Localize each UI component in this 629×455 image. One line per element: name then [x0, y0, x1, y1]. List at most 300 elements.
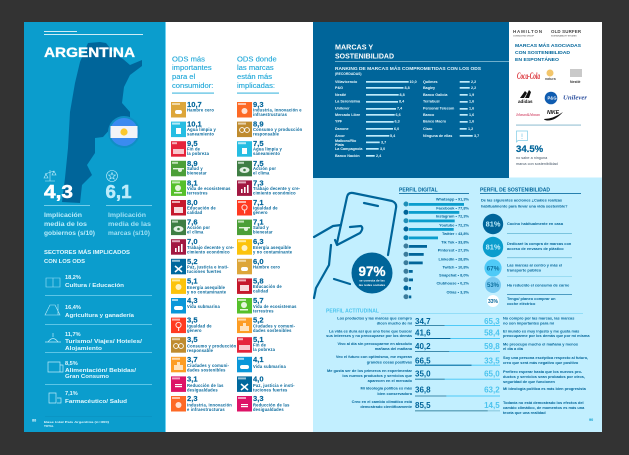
brands score: 6,1	[106, 182, 132, 202]
list: brand SDGs: 4,0	[253, 374, 264, 383]
list: consumer SDGs: y no contaminante	[187, 290, 227, 294]
right statements: seguridad de que funcionen	[503, 379, 556, 384]
sector: tourism: Turismo/ Viajes/ Hoteles/	[65, 339, 143, 345]
list: brand SDGs: Vida submarina	[253, 364, 286, 369]
bar chart: social networks: Facebook • 77,8%	[436, 206, 470, 211]
list: brand SDGs: Energía asequible	[253, 245, 292, 250]
list: consumer SDGs: 3,5	[187, 335, 198, 344]
left statements: Creo en el cambio climático está	[352, 399, 413, 404]
callout: 97 percent	[352, 252, 392, 294]
panel: spontaneous brand association	[509, 22, 602, 178]
bars: right column: 1,2	[468, 127, 473, 131]
bars: right column: Bagley	[423, 86, 436, 90]
bars: left column: La Serenísima	[335, 100, 361, 104]
list: consumer SDGs: 4,3	[187, 296, 198, 305]
list: consumer SDGs: Igualdad de	[187, 324, 212, 328]
bars: right column: 1,6	[469, 100, 474, 104]
heading: consumer: consumidor:	[172, 81, 213, 90]
bar chart: social networks: Instagram • 72,3%	[436, 214, 470, 219]
left statements: bien conservadora	[377, 391, 413, 396]
item: meat	[485, 277, 572, 295]
bars: left column: 3,0	[380, 147, 385, 151]
item: transport: transporte público	[507, 268, 542, 272]
left values: 34,7	[415, 317, 431, 326]
heading: consumer: importantes	[172, 63, 212, 72]
sectors heading: SECTORES MÁS IMPLICADOS	[44, 249, 131, 256]
government score: 4,3	[44, 182, 73, 202]
list: brand SDGs: la pobreza	[253, 347, 276, 352]
brand logos	[515, 69, 588, 121]
bars: right column: 1,6	[469, 106, 474, 110]
list: consumer SDGs: Consumo y producción	[187, 344, 237, 348]
list: brand SDGs: 5,7	[253, 296, 264, 305]
list: brand SDGs: Ciudades y comuni-	[253, 324, 296, 328]
left values	[415, 317, 431, 410]
list: brand SDGs: Consumo y producción	[253, 127, 303, 132]
right values: 33,5	[484, 356, 500, 366]
footer: page number and base: TOTAL	[44, 424, 54, 428]
sector: agriculture: Agricultura y ganadería	[65, 313, 134, 319]
question: habitualmente para llevar una vida sostenible?	[481, 204, 568, 209]
left statements	[326, 316, 413, 409]
list: consumer SDGs: Energía asequible	[187, 285, 226, 290]
subheading	[335, 65, 482, 76]
bar chart: social networks: Twitter • 43,8%	[442, 231, 470, 236]
brand logos: Nestlé	[570, 80, 581, 84]
right values	[484, 317, 500, 410]
list: brand SDGs: Paz, justicia e insti-	[253, 383, 295, 388]
heading: consumer: ODS más	[172, 54, 205, 64]
sector: culture: Cultura / Educación	[65, 283, 124, 289]
list: brand SDGs: 7,5	[253, 159, 264, 168]
list: consumer SDGs: Educación de	[187, 206, 216, 210]
brand logos: NIKE	[547, 110, 560, 116]
list: brand SDGs: 3,3	[253, 394, 264, 403]
right statements	[503, 316, 590, 415]
list: consumer SDGs: tuciones fuertes	[187, 269, 222, 274]
icon: Argentine flag	[108, 116, 140, 148]
bars: left column: Plata	[335, 143, 345, 147]
list: brand SDGs: el clima	[253, 170, 270, 176]
panel: digital profile	[314, 188, 470, 300]
list: brand SDGs: tuciones fuertes	[253, 388, 288, 392]
footer: page number and base	[32, 418, 109, 428]
list: brand SDGs: cimiento económico	[253, 190, 296, 196]
bars: left column: 8,4	[399, 100, 405, 104]
list: consumer SDGs: e infraestructuras	[187, 407, 225, 412]
list: consumer SDGs: dades sostenibles	[187, 368, 226, 372]
footer: page number and base: 88	[32, 418, 36, 422]
left values: 85,5	[415, 401, 431, 410]
left values: 36,8	[415, 386, 431, 395]
sectors heading	[44, 249, 131, 265]
list: brand SDGs: y no contaminante	[253, 250, 293, 254]
subheading: (RECORDADAS)	[335, 72, 362, 76]
bar chart: social networks: Whatsapp • 91,3%	[436, 197, 470, 202]
bar chart: social networks: Otras • 3,3%	[446, 290, 470, 295]
left values: 40,2	[415, 342, 431, 351]
partner logos: HAMILTON	[513, 29, 542, 34]
bars: left column: La Campagnola	[335, 147, 363, 151]
item: cooking: 81%	[486, 220, 501, 229]
bars: left column: Banco Nación	[335, 154, 360, 158]
heading: brands: implicadas:	[237, 81, 275, 90]
left statements: los nuevos productos y servicios que	[342, 373, 413, 378]
bars: right column: 1,9	[469, 93, 474, 97]
right statements: cambio climático, de momentos es más una	[503, 405, 585, 410]
list: consumer SDGs: Salud y	[187, 166, 203, 171]
list: consumer SDGs: 9,5	[187, 139, 198, 148]
right values: 59,8	[484, 342, 500, 351]
sector: food: Gran Consumo	[65, 374, 109, 380]
map of Argentina	[62, 42, 142, 203]
right values: 65,3	[484, 317, 500, 326]
bars: left column: 8,8	[400, 93, 405, 97]
brands score: Implicación	[108, 212, 146, 219]
heading: consumer	[172, 54, 214, 94]
panel: SDG rankings	[166, 22, 313, 432]
bars: left column: 5,4	[390, 134, 396, 138]
left statements: mañana del mañana	[375, 346, 413, 351]
bar chart: social networks: Youtube • 72,2%	[439, 223, 470, 228]
list: brand SDGs: Trabajo decente y cre-	[253, 186, 301, 191]
left values: 35,0	[415, 370, 431, 379]
bar chart: social networks	[403, 197, 470, 300]
list: consumer SDGs: 10,7	[187, 100, 202, 109]
panel: Argentina overview	[24, 22, 166, 432]
bars: right column: Banco	[423, 113, 435, 117]
panel: sustainability profile	[480, 188, 581, 307]
list: consumer SDGs: género	[187, 328, 202, 333]
list: brand SDGs: Educación de	[253, 284, 282, 289]
heading	[515, 42, 582, 63]
sector: pharma: Farmacéutico/ Salud	[65, 399, 127, 405]
heading	[335, 42, 394, 60]
list: consumer SDGs: Fin de	[187, 146, 201, 152]
item: cooking	[483, 214, 572, 234]
partner logos	[513, 29, 582, 38]
list: consumer SDGs: 8,9	[187, 159, 198, 168]
government score: gobiernos (s/10)	[44, 230, 95, 237]
right statements: no son importantes para mí	[503, 320, 555, 326]
left statements: Veo el futuro con optimismo, me esperan	[336, 354, 413, 359]
icon: scales	[44, 170, 56, 181]
list: brand SDGs: 9,3	[253, 100, 264, 109]
bar chart: social networks: Snapchat • 8,0%	[439, 273, 470, 278]
list: brand SDGs: bienestar	[253, 230, 273, 234]
list: consumer SDGs: 8,1	[187, 178, 198, 187]
partner logos: SUSTAINABILITY STUDIES	[551, 34, 577, 38]
list: brand SDGs	[237, 100, 303, 412]
heading: brands: están más	[237, 72, 272, 81]
bars: left column: P&G	[335, 86, 343, 90]
icon: star badge	[106, 170, 118, 182]
question	[481, 198, 568, 209]
item: electric car	[487, 295, 556, 307]
list: consumer SDGs: Industria, innovación	[187, 402, 232, 408]
stat: no brand: no sabe a ninguna	[516, 156, 548, 160]
sector: tourism: 11,7%	[65, 332, 81, 338]
list: brand SDGs: dades sostenibles	[253, 328, 292, 333]
left statements: dicen mucho de mí	[377, 321, 413, 326]
item: meat: 53%	[487, 283, 500, 289]
left statements: sus intereses y no preocuparse por los demás	[326, 333, 412, 338]
left values: 41,6	[415, 328, 431, 338]
page number: 90	[589, 418, 593, 422]
right values: 63,2	[484, 386, 500, 395]
left statements: grandes cosas positivas	[367, 360, 412, 364]
brand logos: Unilever	[563, 96, 588, 102]
government score	[44, 182, 95, 237]
heading: MARCAS Y	[335, 42, 373, 52]
bars: left column: Villavicencio	[335, 80, 358, 84]
partner logos: OLD SURFER	[551, 29, 582, 34]
item: transport	[484, 259, 572, 277]
left values: 66,5	[415, 356, 431, 366]
list: brand SDGs: Salud y	[253, 225, 269, 230]
heading: PERFIL DE SOSTENIBILIDAD	[480, 188, 550, 194]
government score: Implicación	[44, 212, 82, 219]
list: brand SDGs: 5,1	[253, 335, 264, 344]
list: brand SDGs: 5,8	[253, 276, 264, 285]
list: brand SDGs: 7,5	[253, 139, 264, 148]
list: consumer SDGs: 10,1	[187, 120, 203, 129]
list: brand SDGs: Hambre cero	[253, 264, 280, 270]
bars: right column: 3,7	[474, 134, 479, 138]
sector: food: Alimentación/ Bebidas/	[65, 368, 137, 374]
partner logos: CONSULTING GROUP	[513, 36, 535, 38]
list: brand SDGs: terrestres	[253, 308, 274, 314]
right statements: creo que será más negativo que positivo	[503, 360, 579, 365]
list: brand SDGs: infraestructuras	[253, 112, 288, 117]
right statements: Prefiero esperar hasta que los nuevos pro-	[503, 369, 583, 374]
bars: left column: 2,4	[376, 154, 382, 158]
list: brand SDGs: 4,1	[253, 355, 264, 364]
bars: left column: Danone	[335, 127, 349, 131]
right statements: Soy una persona escéptica respecto al futuro,	[503, 355, 588, 360]
stat: no brand	[516, 144, 558, 166]
list: brand SDGs: 5,2	[253, 316, 264, 325]
list: consumer SDGs: 5,1	[187, 276, 198, 285]
bars: right column: Claro	[423, 127, 433, 131]
brands score: marcas (s/10)	[108, 230, 150, 237]
list: consumer SDGs: Ciudades y comuni-	[187, 363, 230, 368]
bars: right column: Personal Telecom	[423, 106, 455, 110]
sector: culture: 18,2%	[65, 275, 81, 281]
item: cooking: Cocino habitualmente en casa	[507, 221, 564, 226]
item: transport: Las marcas al centro y más el	[507, 262, 562, 268]
heading: PERFIL DIGITAL	[399, 188, 438, 194]
panel: attitudinal profile	[326, 308, 593, 422]
callout: 97 percent: se conecta de las	[359, 278, 385, 282]
callout: 97 percent: 97%	[358, 264, 386, 279]
right statements: Me preocupo mucho el mañana y menos	[503, 342, 578, 346]
right statements: El mundo es muy injusto y me gusta más	[503, 328, 579, 334]
bars: left column: 6,6	[396, 113, 401, 117]
bars: left column: 6,3	[394, 120, 400, 124]
sector: food	[45, 361, 152, 385]
list: brand SDGs: Industria, innovación e	[253, 108, 302, 112]
left statements: aparecen en el mercado	[368, 378, 413, 383]
list: consumer SDGs: 5,2	[187, 257, 198, 266]
title: ARGENTINA	[44, 45, 135, 60]
bars: left column: 7,4	[397, 106, 403, 110]
item: plastic packaging: acceso de envases de plástico	[507, 246, 564, 251]
stat: no brand: marca con sostenibilidad	[516, 162, 558, 166]
item: plastic packaging: Dedicaré la compra de marcas con	[507, 241, 572, 246]
list: brand SDGs: Igualdad de	[253, 206, 278, 210]
right statements: No compro por las marcas, las marcas	[503, 316, 574, 320]
list: consumer SDGs: Reducción de las	[187, 383, 224, 388]
bars: right column: Quilmes	[423, 80, 438, 84]
list: consumer SDGs	[171, 100, 237, 412]
brands score: media de las	[108, 221, 152, 228]
government score: media de los	[44, 221, 88, 228]
brand logos: natura	[545, 77, 556, 81]
list: consumer SDGs: 8,0	[187, 198, 198, 207]
list: consumer SDGs: Paz, justicia e insti-	[187, 264, 229, 270]
heading: EN ESPONTÁNEO	[515, 56, 559, 63]
list: consumer SDGs: desigualdades	[187, 388, 218, 392]
item: plastic packaging: 81%	[486, 243, 501, 252]
bars: left column: Unilever	[335, 106, 350, 110]
list: brand SDGs: Acción por	[253, 166, 276, 171]
list: brand SDGs: desigualdades	[253, 407, 284, 412]
sector: agriculture	[45, 304, 152, 325]
list: consumer SDGs: Trabajo decente y cre-	[187, 245, 235, 250]
item: plastic packaging	[483, 237, 572, 258]
list: brand SDGs: 7,1	[253, 198, 264, 207]
heading: SOSTENIBILIDAD	[335, 52, 394, 60]
list: consumer SDGs: 2,3	[187, 394, 198, 403]
panel: brand ranking	[313, 22, 509, 178]
bars: right column: Banco Galicia	[423, 93, 448, 97]
list: brand SDGs: Reducción de las	[253, 402, 290, 408]
bars: right column: Ninguna de ellas	[423, 134, 452, 138]
bars: left column: Nestlé	[335, 93, 346, 97]
left statements: Me gusta ser de los primeros en experimentar	[327, 368, 412, 373]
icon: alert speech box	[516, 131, 528, 142]
sector: pharma: 7,1%	[65, 391, 78, 397]
right statements: el día a día	[503, 346, 524, 351]
bar chart: social networks: LinkedIn • 28,8%	[438, 256, 470, 261]
question: De las siguientes acciones ¿Cuáles realizas	[481, 198, 562, 203]
sector: agriculture: 16,4%	[65, 305, 81, 311]
list: consumer SDGs: 3,7	[187, 355, 198, 364]
subheading: RANKING DE MARCAS MÁS COMPROMETIDAS CON LOS ODS	[335, 65, 482, 72]
bars: left column: 10,0	[410, 80, 417, 84]
list: brand SDGs: Fin de	[253, 342, 267, 348]
brand logos: adidas	[518, 99, 533, 104]
list: brand SDGs: 7,1	[253, 218, 264, 227]
list: consumer SDGs: 3,1	[187, 374, 198, 383]
list: brand SDGs: saneamiento	[253, 151, 280, 156]
bars: left column: 3,7	[381, 140, 386, 144]
item: electric car: Tengo/ planeo comprar un	[507, 296, 556, 301]
right values: 14,5	[484, 401, 500, 410]
bars: right column	[423, 80, 479, 138]
sector: food: 8,5%	[65, 361, 78, 367]
bar chart: social networks: Pinterest • 27,3%	[438, 248, 470, 253]
left statements: demostrado científicamente	[360, 404, 413, 409]
brands score	[106, 182, 152, 237]
bars: left column: YPF	[335, 120, 343, 124]
list: consumer SDGs: cimiento económico	[187, 250, 230, 254]
bars: right column: 1,6	[469, 113, 474, 117]
scale bars	[415, 325, 500, 411]
list: brand SDGs: Vida de ecosistemas	[253, 304, 297, 309]
list: brand SDGs: Agua limpia y	[253, 146, 282, 152]
bars: right column: 1,6	[469, 120, 474, 124]
list: brand SDGs: 6,0	[253, 257, 264, 266]
right statements: Todavía no está demostrado los efectos del	[503, 400, 584, 405]
heading: brands: las marcas	[237, 63, 274, 72]
list: consumer SDGs: 7,6	[187, 218, 198, 227]
bars: left column: Mercado Libre	[335, 113, 360, 117]
list: consumer SDGs: el clima	[187, 230, 204, 234]
list: consumer SDGs: Vida de ecosistemas	[187, 186, 231, 191]
right statements: Mi ideología política es más bien progresista	[503, 386, 587, 391]
item: electric car: coche eléctrico	[507, 301, 536, 306]
list: consumer SDGs: 3,5	[187, 316, 198, 325]
callout: 97 percent: las redes sociales	[359, 283, 386, 287]
sector: tourism: Alojamiento	[65, 346, 102, 352]
right statements: teoría que una realidad	[503, 410, 546, 415]
list: consumer SDGs: saneamiento	[187, 132, 214, 136]
list: consumer SDGs: terrestres	[187, 190, 208, 196]
right statements: preocuparme por los demás que por mí misma	[503, 333, 590, 338]
left statements: Los productos y las marcas que compro	[337, 316, 413, 321]
heading: consumer: para el	[172, 72, 196, 81]
item: transport: 67%	[487, 265, 500, 272]
panel: right page background	[313, 22, 602, 432]
sector: tourism	[45, 332, 152, 353]
list: consumer SDGs: Acción por	[187, 225, 210, 230]
sector: pharma	[45, 391, 152, 416]
bar chart: social networks: Clubhouse • 0,2%	[436, 281, 470, 286]
left statements: La vida es dura así que uno tiene que buscar	[329, 328, 412, 334]
bars: left column: 6,0	[394, 127, 399, 131]
list: consumer SDGs: bienestar	[187, 170, 207, 176]
sectors heading: CON LOS ODS	[44, 259, 86, 265]
bars: right column: 2,2	[471, 86, 476, 90]
list: consumer SDGs: calidad	[187, 210, 203, 215]
heading: MARCAS MÁS ASOCIADAS	[515, 42, 582, 49]
sector: culture	[45, 275, 152, 296]
list: brand SDGs: 8,9	[253, 120, 264, 129]
heading: CON SOSTENIBILIDAD	[515, 50, 570, 56]
list: brand SDGs: 7,3	[253, 178, 264, 187]
brand logos: P&G	[548, 96, 557, 100]
list: consumer SDGs: 7,0	[187, 237, 198, 246]
bars: left column: 8,8	[404, 86, 410, 90]
footer: page number and base: Base total País Argentina (n=300)	[44, 420, 109, 424]
stat: no brand: 34.5%	[516, 144, 544, 155]
bars: left column	[335, 80, 417, 158]
list: consumer SDGs: Vida submarina	[187, 304, 220, 309]
list: consumer SDGs: responsable	[187, 348, 214, 353]
heading: PERFIL ACTITUDINAL	[326, 308, 379, 314]
bars: left column: Malboro/Río	[335, 139, 357, 143]
list: consumer SDGs: Hambre cero	[187, 108, 214, 112]
bars: right column: 2,2	[471, 80, 476, 84]
list: consumer SDGs: la pobreza	[187, 151, 210, 156]
bars: left column: Arcor	[335, 134, 345, 138]
right values: 58,4	[484, 328, 500, 338]
list: brand SDGs: calidad	[253, 288, 269, 294]
bar chart: social networks: Tik Tok • 33,8%	[441, 239, 470, 244]
item: electric car: 33%	[488, 299, 499, 305]
